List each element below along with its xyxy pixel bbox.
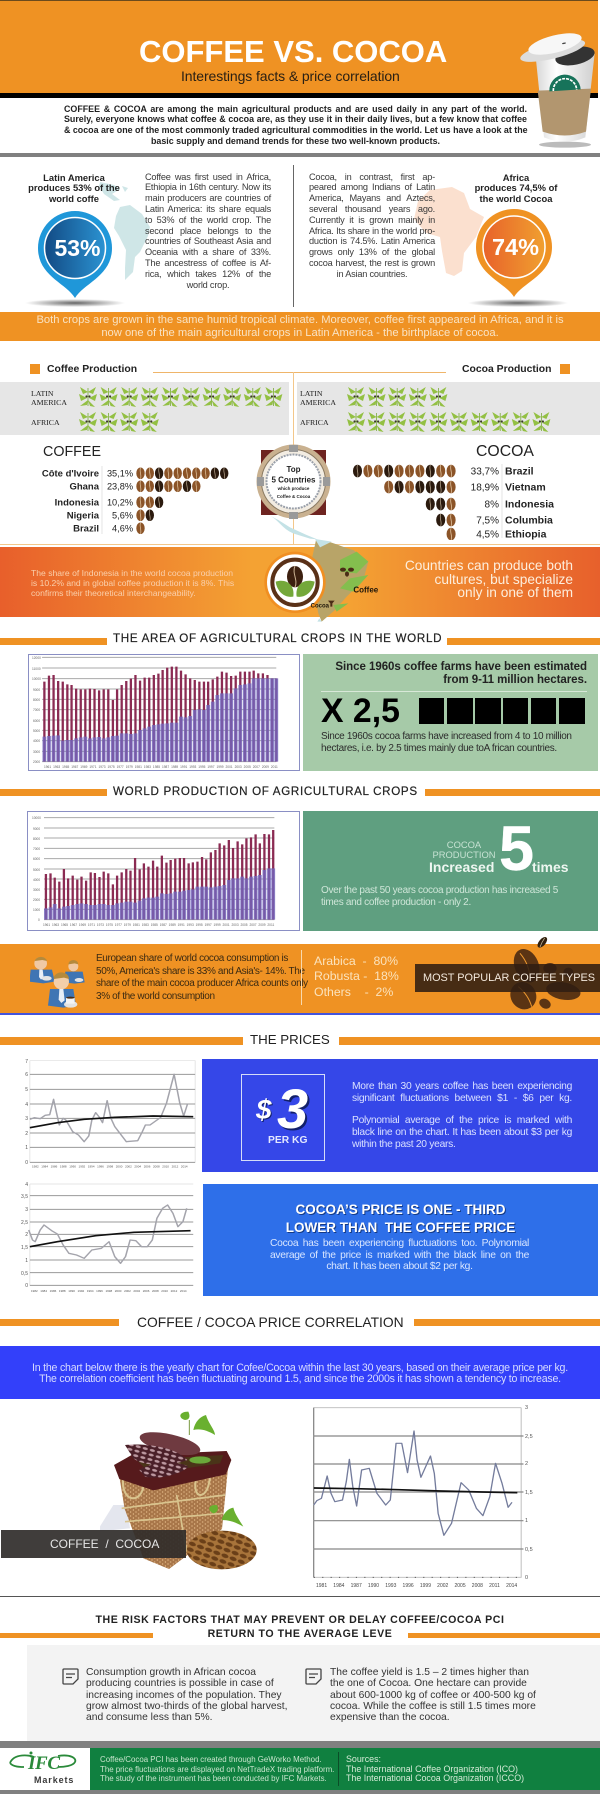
logo: IFC Markets: Markets [34,1775,74,1785]
panel: top coffee countries [42,444,228,534]
axis labels: 1,5 [525,1490,533,1496]
axis labels: 5000 [33,729,40,733]
text: African consumption: and consume less than 5%. [86,1712,212,1723]
callout: correlation explanation [0,1346,600,1399]
axis labels: 10000 [32,816,41,820]
axis labels: 11000 [32,667,41,671]
text: method: Coffee/Cocoa PCI has been created through GeWorko Method. [100,1755,322,1764]
figure: X 2,5: X 2,5 [321,692,400,730]
chart: area of crops [28,654,300,771]
axis labels: 8000 [33,837,40,841]
text: consumption shares: European share of world cocoa consumption is [96,953,288,964]
axis labels: 7 [25,1059,28,1065]
text: coffee fluctuations: significant fluctuations between $1 - $6 per kg. [352,1093,572,1104]
illustration: Americas map and logo: Cocoa [311,604,330,610]
text: coffee fluctuations: More than 30 years coffee has been experiencing [352,1081,572,1092]
banner: coffee / cocoa [1,1530,186,1558]
header banner [0,0,598,98]
heading: the prices [0,1032,600,1047]
axis labels [25,1059,28,1166]
label: cocoa production: COCOA [447,838,481,850]
text: Indonesia share: confirms their theoretical interchangeability. [31,588,196,598]
list: coffee types [314,954,399,999]
icon: 74% map pin [471,209,566,307]
country labels: Indonesia [55,498,100,508]
axis labels: 0,5 [525,1547,533,1553]
heading: Latin America share: world coffe [49,193,99,204]
callout: humid tropical climate [0,312,600,341]
axis labels: 3 [525,1405,528,1411]
heading: risk factors: THE RISK FACTORS THAT MAY PREVENT OR DELAY COFFEE/COCOA PCI [96,1614,504,1626]
panel: coffee price [202,1059,598,1172]
label: Latin America: LATIN [31,389,54,398]
axis labels [32,816,274,927]
panel: coffee origin [28,172,272,307]
chart: coffee price: 1982 1984 1986 1988 1990 1992 1994 1996 1998 2000 2002 2004 2006 2008 2010 2012 2014 [32,1164,188,1168]
map: Latin America [99,182,150,280]
heading: risk factors [0,1614,600,1641]
figure: $3 per kg: 3 [277,1077,308,1140]
text: coffee yield: cocoa. While the coffee is still 1.5 times more [330,1701,536,1712]
heading: Africa share: Africa [503,172,529,183]
icon: note [305,1668,322,1685]
panel: cocoa price [203,1184,598,1296]
icons: coffee plants [79,387,282,432]
text: cocoa fluctuations [270,1238,529,1272]
banner: coffee / cocoa: COFFEE / COCOA [50,1537,159,1551]
axis labels: 3 [25,1207,28,1213]
heading: COFFEE: COFFEE [43,444,101,460]
axis labels: 2,5 [525,1434,533,1440]
axis labels: 0 [525,1575,528,1581]
label: Latin America: AMERICA [300,398,336,407]
percentage values: 33,7% [471,466,499,478]
legend: coffee production: Coffee Production [47,364,137,375]
axis labels [525,1405,533,1581]
chart: coffee/cocoa ratio [305,1400,545,1592]
banner: most popular coffee types: MOST POPULAR COFFEE TYPES [423,972,595,984]
heading: price correlation [0,1314,600,1330]
text: method: The study of the instrument has been conducted by IFC Markets. [100,1774,327,1783]
badge: top 5 countries: 5 Countries [271,476,316,484]
axis labels: 1000 [33,908,40,912]
icon: note [62,1668,79,1685]
axis labels: 12000 [32,656,41,660]
text: coffee origin: to 53% of the world crop. The [145,215,271,225]
text: cocoa fluctuations: chart. It has been about $2 per kg. [326,1261,473,1272]
text: African consumption: Consumption growth in African cocoa [86,1667,256,1678]
divider: gray rule [0,153,600,157]
heading: price correlation: COFFEE / COCOA PRICE CORRELATION [137,1314,404,1330]
panel: production growth [303,811,598,931]
text: African consumption: increasing incomes of the population. They [86,1690,282,1701]
panel: cocoa origin [309,172,566,307]
callout: both cultures: only in one of them [457,585,573,600]
axis labels: 1 [25,1258,28,1264]
label: Latin America [31,389,67,407]
title: COFFEE VS. COCOA [139,34,447,69]
icon: 74% map pin: 74% [492,234,539,260]
list: coffee types: Others - 2% [314,985,393,999]
text: past 50 years: times and coffee production - only 2. [321,896,471,908]
text: cocoa origin [309,172,436,279]
text: coffee fluctuations: within the past 20 years. [352,1139,456,1150]
text: cocoa origin: duction is 74.5%. Latin America [309,236,435,246]
text: Indonesia share: is 10.2% and in global coffee production it is 8%. This [31,578,234,588]
label: Latin America: LATIN [300,389,323,398]
callout: both cultures [405,558,573,600]
list: coffee types: Arabica - 80% [314,954,398,968]
country labels: Ghana [69,482,100,492]
axis labels: 2 [25,1232,28,1238]
text: coffee origin: world crop. [187,280,229,290]
text: coffee origin: main producers are countries of [145,193,271,203]
heading: area of agricultural crops [0,632,600,645]
heading: Africa share [475,172,558,204]
label: cocoa production [432,838,496,860]
figure: $3 per kg: $ [256,1094,272,1125]
panel: cocoa production pictogram [297,382,600,435]
axis labels: 1 [25,1145,28,1151]
figure: increased 5 times: 5 [499,814,534,884]
illustration: Americas map and logo [264,516,379,622]
text: coffee origin: Oceania with a share of 33%. [145,247,271,257]
footer [0,1741,600,1794]
list: coffee types: Robusta - 18% [314,969,399,983]
text: coffee origin [145,172,272,290]
axis labels: 3,5 [21,1194,28,1200]
text: coffee yield: expensive than the cocoa. [330,1712,450,1723]
text: coffee fluctuations: black line on the chart. It has been about $3 per kg [352,1127,572,1138]
figure: $3 per kg [241,1074,325,1161]
intro text: basic supply and demand trends for these two well-known products. [151,136,440,146]
axis labels: 4000 [33,878,40,882]
percentage values [107,468,133,534]
text: cocoa fluctuations: average of the price is marked with the black line on the [270,1250,529,1260]
text: cocoa origin: cocoa harvest, the rest is grown [309,258,435,268]
text: coffee origin: second place belongs to the [145,226,271,236]
text: coffee origin: Ethiopia in 16th century. Now its [145,182,271,192]
axis labels: 5 [25,1087,28,1093]
axis labels: 4 [25,1182,28,1188]
text: coffee farms: Since 1960s coffee farms have been estimated [335,660,587,672]
label: Africa: AFRICA [300,418,329,427]
country labels: Indonesia [505,498,554,510]
percentage values: 8% [485,500,499,510]
map: Africa [414,187,484,276]
percentage values: 35,1% [107,468,133,478]
chart: coffee/cocoa ratio: 1981 1984 1987 1990 1993 1996 1999 2002 2005 2008 2011 2014 [316,1583,517,1589]
percentage values: 7,5% [476,516,499,526]
axis labels: 6000 [33,857,40,861]
text: cocoa farms: hectares, i.e. by 2.5 times mainly due toA frican countries. [321,742,557,754]
icon: 53% map pin: 53% [54,235,101,261]
illustration: Americas map and logo: Coffee [353,586,379,595]
panel: coffee production pictogram [0,382,289,435]
icon: takeaway coffee cup [520,33,595,148]
heading: one-third lower [203,1201,598,1237]
text: coffee yield: The coffee yield is 1.5 – 2 times higher than [330,1667,529,1678]
text: coffee farms [335,660,587,686]
badge: top 5 countries: which produce [277,486,310,491]
text: cocoa origin: peared among Indians of Latin [309,182,435,192]
axis labels: 1 [525,1518,528,1524]
axis labels: 8000 [33,698,40,702]
text: cocoa origin: several thousand years ago. [309,204,435,214]
intro text: Surely, everyone knows what coffee & cocoa are, as they use it in their daily lives, but a few know that coffee [64,114,527,124]
heading: Latin America share: produces 53% of the [28,182,120,193]
axis labels: 1961 1963 1965 1967 1969 1971 1973 1975 1977 1979 1981 1983 1985 1987 1989 1991 1993 1995 1997 1999 2001 2003 2005 2007 2009 2011 [44,765,278,769]
icons: cocoa plants [347,387,550,432]
heading: the prices: THE PRICES [250,1032,330,1047]
heading: Africa share: the world Cocoa [480,193,552,204]
axis labels: 7000 [33,708,40,712]
axis labels [21,1182,28,1289]
axis labels: 3000 [33,888,40,892]
axis labels: 3 [25,1116,28,1122]
label: Latin America [300,389,336,407]
text: method: The price fluctuations are displayed on NetTradeX trading platform. [100,1765,334,1774]
callout: humid tropical climate: now one of the main agricultural crops in Latin America - the birthplace of cocoa. [101,326,499,338]
text: cocoa farms: Since 1960s cocoa farms have increased from 4 to 10 million [321,731,572,742]
icon: 53% map pin [28,211,122,307]
axis labels: 0 [38,918,40,922]
figure: increased 5 times: Increased [429,859,494,875]
text: coffee yield: about 600-1000 kg of coffee or 400-500 kg of [330,1690,536,1701]
text: coffee origin: countries of Southeast Asia and [145,236,271,246]
axis labels: 6000 [33,719,40,723]
icon: six black blocks [419,698,585,724]
panel: method note [90,1748,600,1790]
axis labels: 2,5 [21,1220,28,1226]
axis labels: 2 [525,1461,528,1467]
heading: world production: WORLD PRODUCTION OF AGRICULTURAL CROPS [113,785,418,798]
axis labels: 3000 [33,750,40,754]
axis labels: 9000 [33,827,40,831]
intro text: COFFEE & COCOA are among the main agricultural products and are used daily in any part of the world. [64,104,527,114]
icon: three consumers [30,956,85,1008]
axis labels: 0 [25,1160,28,1166]
text: past 50 years [321,885,558,908]
bean rows [353,465,456,540]
figure: $3 per kg: PER KG [268,1135,307,1146]
heading: one-third lower: LOWER THAN THE COFFEE PRICE [286,1220,515,1235]
panel: risk factors [27,1645,600,1741]
panel: farm area growth [303,654,598,771]
axis labels: 5000 [33,868,40,872]
heading: area of agricultural crops: THE AREA OF AGRICULTURAL CROPS IN THE WORLD [113,632,442,645]
heading: one-third lower: COCOA’S PRICE IS ONE - THIRD [295,1202,506,1217]
heading: Latin America share [28,172,120,204]
badge: top 5 countries: Top [286,465,301,474]
text: coffee farms: from 9-11 million hectares. [443,674,587,686]
figure: increased 5 times [429,814,569,884]
logo: IFC Markets [0,1748,90,1790]
intro text [64,104,528,146]
text: sources: The International Coffee Organization (ICO) [346,1764,518,1774]
country labels: Columbia [505,514,553,526]
text: sources [346,1755,524,1784]
text: African consumption [86,1667,287,1723]
chart: cocoa price [18,1178,196,1296]
text: coffee fluctuations [352,1081,572,1151]
axis labels: 6 [25,1072,28,1078]
axis labels: 2 [25,1131,28,1137]
country labels [505,466,554,540]
axis labels: 7000 [33,847,40,851]
text: coffee yield: the one of Cocoa. One hectare can provide [330,1678,527,1689]
country labels: Côte d'Ivoire [42,468,99,480]
panel: interchangeability band [0,547,600,617]
text: coffee origin: rica, which takes 12% of the [145,269,271,279]
country labels: Brazil [505,466,534,478]
logo: IFC Markets: IFC [27,1753,60,1774]
callout: both cultures: Countries can produce both [405,558,573,573]
badge: top 5 countries [256,444,330,519]
chart: cocoa price: 1982 1984 1986 1988 1990 1992 1994 1996 1998 2000 2002 2004 2006 2008 2010 2012 2014 [31,1289,187,1293]
axis labels: 10000 [32,677,41,681]
text: cocoa origin: in Asian countries. [337,269,407,279]
text: sources: Sources: [346,1754,381,1764]
axis labels: 9000 [33,688,40,692]
text: Indonesia share: The share of Indonesia in the world cocoa production [31,568,233,578]
heading: risk factors: RETURN TO THE AVERAGE LEVE [208,1628,392,1640]
text: method [100,1755,334,1784]
subtitle: Interestings facts & price correlation [181,68,400,84]
text: cocoa origin: America, Mayans and Aztecs, [309,193,435,203]
badge: top 5 countries: Coffee & Cocoa [277,494,311,499]
text: cocoa origin: grows only 13% of the global [309,247,435,257]
axis labels: 0,5 [21,1271,28,1277]
callout: humid tropical climate: Both crops are grown in the same humid tropical climate. Moreover, coffee first appeared in Africa, and it is [36,314,564,326]
country labels [42,468,100,534]
callout: both cultures: cultures, but specialize [435,572,573,587]
panel: top cocoa countries [352,443,554,540]
figure: increased 5 times: times [532,859,569,875]
text: African consumption: grow almost two-thirds of the global harvest, [86,1701,287,1712]
label: Latin America: AMERICA [31,398,67,407]
text: consumption shares: 50%, America's share is 33% and Asia's- 14%. The [96,966,305,977]
heading: COCOA: COCOA [476,443,534,460]
legend: cocoa production: Cocoa Production [462,364,551,375]
intro text: & cocoa are one of the most commonly traded agricultural commodities in the world. Let us have a look at the [64,125,528,135]
illustration: basket of cocoa and coffee [100,1405,270,1580]
heading: Africa share: produces 74,5% of [475,182,557,193]
chart: world production [27,811,300,931]
text: consumption shares [96,953,308,1002]
axis labels: 4000 [33,739,40,743]
callout: correlation explanation: In the chart below there is the yearly chart for Cofee/Cocoa within the last 30 years, based on their average price per kg. [32,1362,568,1374]
text: cocoa origin: Africa. Its share in the world pro- [309,226,435,236]
percentage values: 10,2% [107,498,133,508]
heading: Latin America share: Latin America [43,172,105,183]
label: cocoa production: PRODUCTION [432,849,496,860]
text: past 50 years: Over the past 50 years cocoa production has increased 5 [321,885,558,896]
percentage values [471,466,499,540]
divider: vertical [293,165,294,307]
country labels: Vietnam [505,482,546,494]
text: African consumption: producing countries is possible in case of [86,1678,274,1689]
text: cocoa origin: Currently it is grown mainly in [309,215,435,225]
text: coffee origin: The ancestress of coffee is Af- [145,258,271,268]
country labels: Brazil [73,524,99,534]
text: cocoa fluctuations: Cocoa has been experiencing fluctuations too. Polynomial [270,1238,529,1249]
percentage values: 5,6% [112,510,133,520]
percentage values: 18,9% [471,482,499,494]
axis labels [32,656,278,769]
text: coffee origin: Latin America: its share equals [145,204,271,214]
axis labels: 4 [25,1102,28,1108]
axis labels: 1961 1963 1965 1967 1969 1971 1973 1975 1977 1979 1981 1983 1985 1987 1989 1991 1993 1995 1997 1999 2001 2003 2005 2007 2009 2011 [43,923,274,927]
banner: most popular coffee types [415,964,600,992]
percentage values: 4,6% [112,524,133,534]
text: coffee origin: Coffee was first used in Africa, [145,172,271,182]
panel: consumption and coffee types [0,944,600,1015]
text: consumption shares: 3% of the world consumption [96,991,215,1002]
chart: coffee price [25,1059,196,1168]
heading: world production [0,785,600,798]
axis labels: 1,5 [21,1245,28,1251]
bean rows [136,467,228,534]
text: sources: The International Cocoa Organization (ICCO) [346,1773,524,1783]
axis labels: 0 [25,1283,28,1289]
callout: correlation explanation: The correlation coefficient has been fluctuating around 1.5, and since the 2000s it has shown a tendency to increase. [39,1373,561,1385]
text: coffee fluctuations: Polynomial average of the price is marked with [352,1115,572,1126]
axis labels: 2000 [33,898,40,902]
text: cocoa origin: Cocoa, in contrast, first ap- [309,172,435,182]
percentage values: 23,8% [107,482,133,492]
axis labels: 2000 [33,760,40,764]
text: consumption shares: share of the main cocoa producer Africa counts only [96,978,308,989]
text: coffee yield [330,1667,536,1723]
icon: coffee beans [510,937,580,1010]
country labels: Nigeria [67,510,100,522]
text: cocoa farms [321,731,572,754]
label: Africa: AFRICA [31,418,60,427]
text: Indonesia share [31,568,234,598]
